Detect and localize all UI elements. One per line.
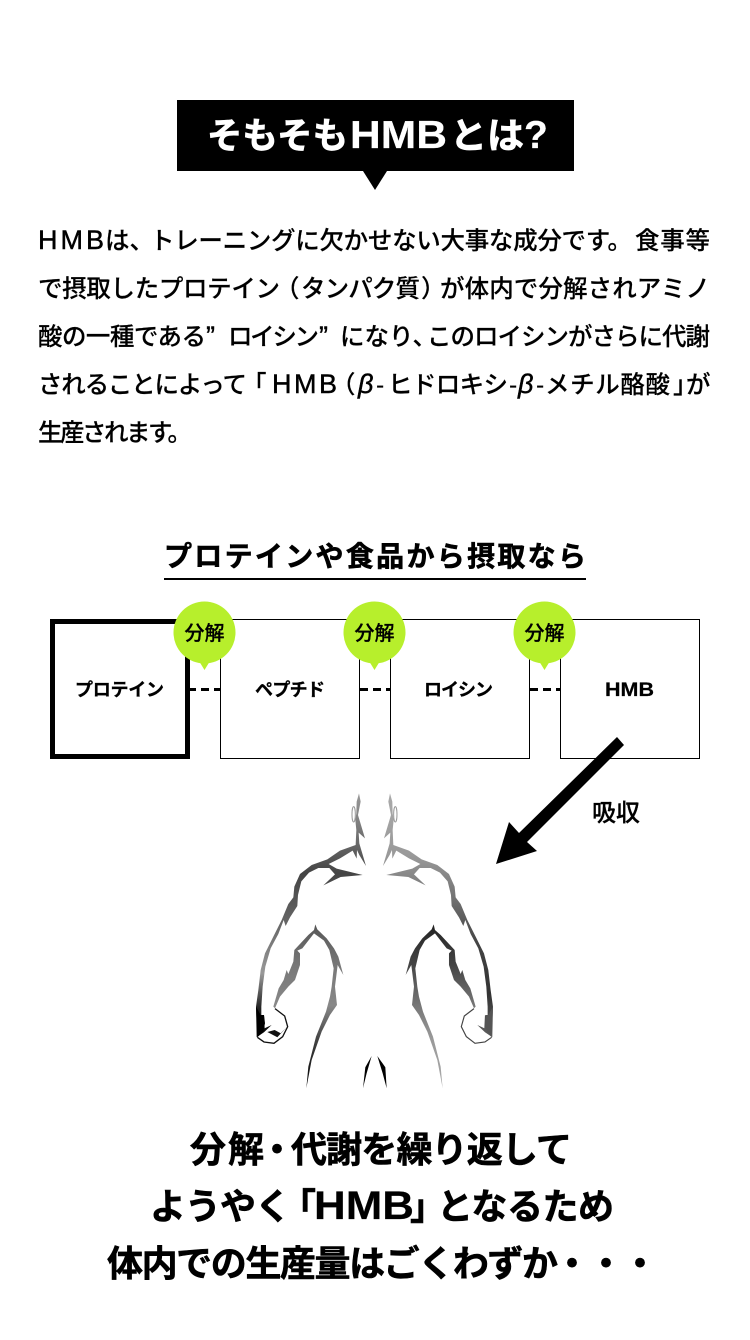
intro text block: 生産されます。 xyxy=(38,419,192,447)
badge: decomposition 3: 分解 xyxy=(524,622,564,645)
conclusion text: HMB xyxy=(314,1184,414,1228)
section heading: プロテインや食品から摂取なら xyxy=(164,541,586,572)
conclusion text: ・ xyxy=(588,1243,624,1284)
intro text block: （ xyxy=(275,275,300,303)
intro text block: - xyxy=(376,372,384,399)
conclusion text: ・ xyxy=(259,1129,295,1170)
intro text block: このロイシンがさらに代謝 xyxy=(427,323,710,351)
conclusion text: 「 xyxy=(280,1186,316,1227)
absorption label: 吸収 xyxy=(592,800,640,827)
intro text block: されることによって xyxy=(38,372,247,399)
intro text block: で摂取したプロテイン xyxy=(38,275,280,303)
box: leucine xyxy=(390,620,530,758)
badge: decomposition 2 xyxy=(344,602,406,670)
conclusion text: 」 xyxy=(410,1186,446,1227)
badge: decomposition 1 xyxy=(174,602,236,670)
intro text block: ） xyxy=(421,275,446,303)
intro text block: ” xyxy=(206,321,215,351)
box: peptide xyxy=(220,620,360,758)
dashed connectors xyxy=(188,688,560,691)
conclusion text: 代謝を繰り返して xyxy=(291,1129,572,1170)
conclusion text: ようやく xyxy=(150,1186,291,1227)
intro text block: ” xyxy=(319,321,328,351)
box: HMB xyxy=(560,620,700,758)
intro text block: は、 xyxy=(105,228,154,255)
intro text block: メチル酪酸 xyxy=(545,371,670,399)
intro text block: 酸の一種である xyxy=(38,323,206,351)
arrow: absorption xyxy=(496,737,624,864)
intro text block: 食事等 xyxy=(635,227,710,255)
conclusion text: 体内での生産量はごくわずか xyxy=(107,1243,558,1284)
title banner: そもそも xyxy=(207,115,348,156)
intro text block: - xyxy=(536,372,544,399)
right side of body xyxy=(383,793,493,1088)
intro text block: - xyxy=(509,372,517,399)
ear outline xyxy=(352,807,355,822)
intro text block: 」 xyxy=(673,372,698,399)
intro text block: （ xyxy=(331,371,356,399)
intro text block xyxy=(38,225,710,447)
icon: muscular body xyxy=(256,793,493,1088)
intro text block: タンパク質 xyxy=(301,275,420,303)
conclusion text: 分解 xyxy=(190,1129,264,1170)
badge: decomposition 1: 分解 xyxy=(184,622,224,645)
box: HMB: HMB xyxy=(605,680,654,701)
box: leucine: ロイシン xyxy=(424,680,493,700)
title banner: とは xyxy=(450,115,524,156)
intro text block: HMB xyxy=(272,369,337,399)
intro text block: が体内で分解されアミノ xyxy=(440,275,710,303)
title banner: ? xyxy=(524,114,548,157)
ear outline xyxy=(394,807,397,822)
badge: decomposition 3 xyxy=(514,602,576,670)
intro text block: ヒドロキシ xyxy=(388,372,508,399)
title banner: HMB xyxy=(350,114,447,157)
intro text block: トレーニングに欠かせない大事な成分です。 xyxy=(150,227,632,255)
intro text block: ロイシン xyxy=(228,324,319,351)
box: protein: プロテイン xyxy=(75,680,164,700)
intro text block: が xyxy=(686,371,710,399)
intro text block: β xyxy=(517,369,533,399)
box: protein xyxy=(52,622,188,756)
intro text block: β xyxy=(357,369,373,399)
conclusion text: となるため xyxy=(437,1186,614,1227)
left side of body xyxy=(256,793,387,1088)
intro text block: HMB xyxy=(38,225,104,255)
intro text block: 「 xyxy=(242,371,266,399)
title banner xyxy=(177,100,574,190)
badge: decomposition 2: 分解 xyxy=(354,622,394,645)
conclusion text xyxy=(107,1129,658,1284)
conclusion text: ・ xyxy=(554,1243,590,1284)
box: peptide: ペプチド xyxy=(255,680,325,700)
intro text block: になり、 xyxy=(340,324,437,351)
conclusion text: ・ xyxy=(622,1243,658,1284)
